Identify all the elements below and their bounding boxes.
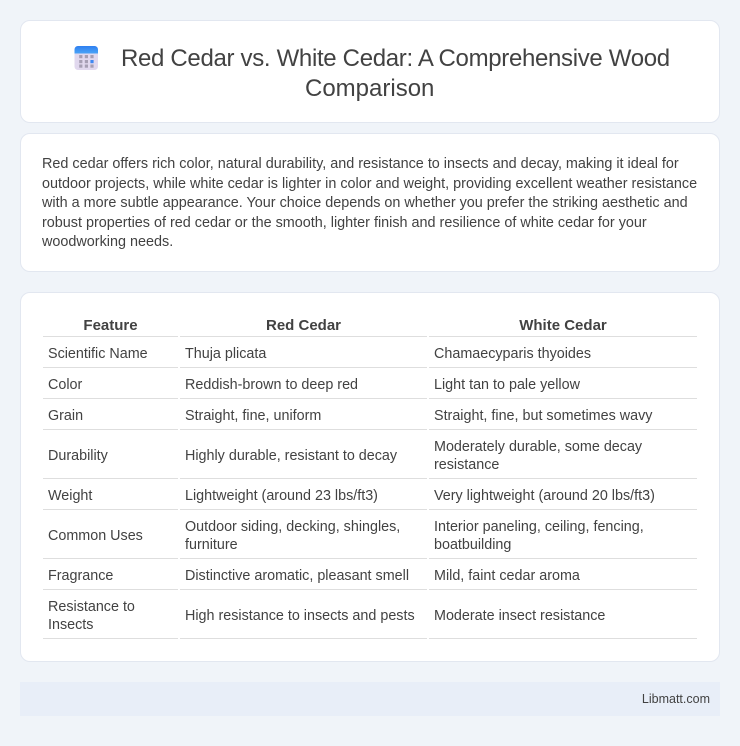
footer credit: Libmatt.com [642, 692, 710, 706]
comparison table: Moderate insect resistance [434, 608, 605, 624]
summary text: woodworking needs. [42, 234, 173, 250]
summary text: robust properties of red cedar or the smooth, lighter finish and resilience of white cedar for your [42, 215, 647, 231]
title: Comparison [305, 74, 434, 102]
comparison table: Reddish-brown to deep red [185, 377, 358, 393]
title: Red Cedar vs. White Cedar: A Comprehensive Wood [121, 45, 670, 72]
summary text: Red cedar offers rich color, natural durability, and resistance to insects and decay, making it ideal for [42, 156, 679, 172]
comparison table: Interior paneling, ceiling, fencing, boatbuilding [434, 519, 644, 553]
comparison table: Red Cedar [266, 317, 341, 334]
comparison table: Color [48, 377, 82, 393]
comparison table: Resistance to Insects [48, 599, 135, 633]
summary text [42, 156, 697, 250]
summary text: with a more subtle appearance. Your choice depends on whether you prefer the striking aesthetic and [42, 195, 688, 211]
comparison table: White Cedar [519, 317, 607, 334]
comparison table: Straight, fine, uniform [185, 408, 321, 424]
comparison table: Lightweight (around 23 lbs/ft3) [185, 488, 378, 504]
comparison table: Distinctive aromatic, pleasant smell [185, 568, 409, 584]
comparison table: Chamaecyparis thyoides [434, 346, 591, 362]
comparison table: Fragrance [48, 568, 113, 584]
comparison table: Moderately durable, some decay resistance [434, 439, 642, 473]
comparison table: Mild, faint cedar aroma [434, 568, 580, 584]
comparison table: Outdoor siding, decking, shingles, furniture [185, 519, 400, 553]
comparison table: Grain [48, 408, 83, 424]
comparison table: Scientific Name [48, 346, 148, 362]
comparison table: Very lightweight (around 20 lbs/ft3) [434, 488, 655, 504]
comparison table: Thuja plicata [185, 346, 266, 362]
comparison table: Weight [48, 488, 92, 504]
comparison table: Common Uses [48, 528, 143, 544]
comparison table: Durability [48, 448, 108, 464]
comparison table [43, 317, 697, 639]
footer bar [20, 682, 720, 716]
header panel [20, 20, 720, 123]
title [121, 45, 670, 102]
comparison table: High resistance to insects and pests [185, 608, 415, 624]
summary panel [20, 133, 720, 272]
comparison table: Light tan to pale yellow [434, 377, 580, 393]
icon: calendar [74, 46, 98, 70]
comparison table: Feature [83, 317, 138, 334]
comparison table: Straight, fine, but sometimes wavy [434, 408, 652, 424]
comparison table panel [20, 292, 720, 662]
summary text: outdoor projects, while white cedar is lighter in color and weight, providing excellent weather resistance [42, 176, 697, 192]
comparison table: Highly durable, resistant to decay [185, 448, 397, 464]
